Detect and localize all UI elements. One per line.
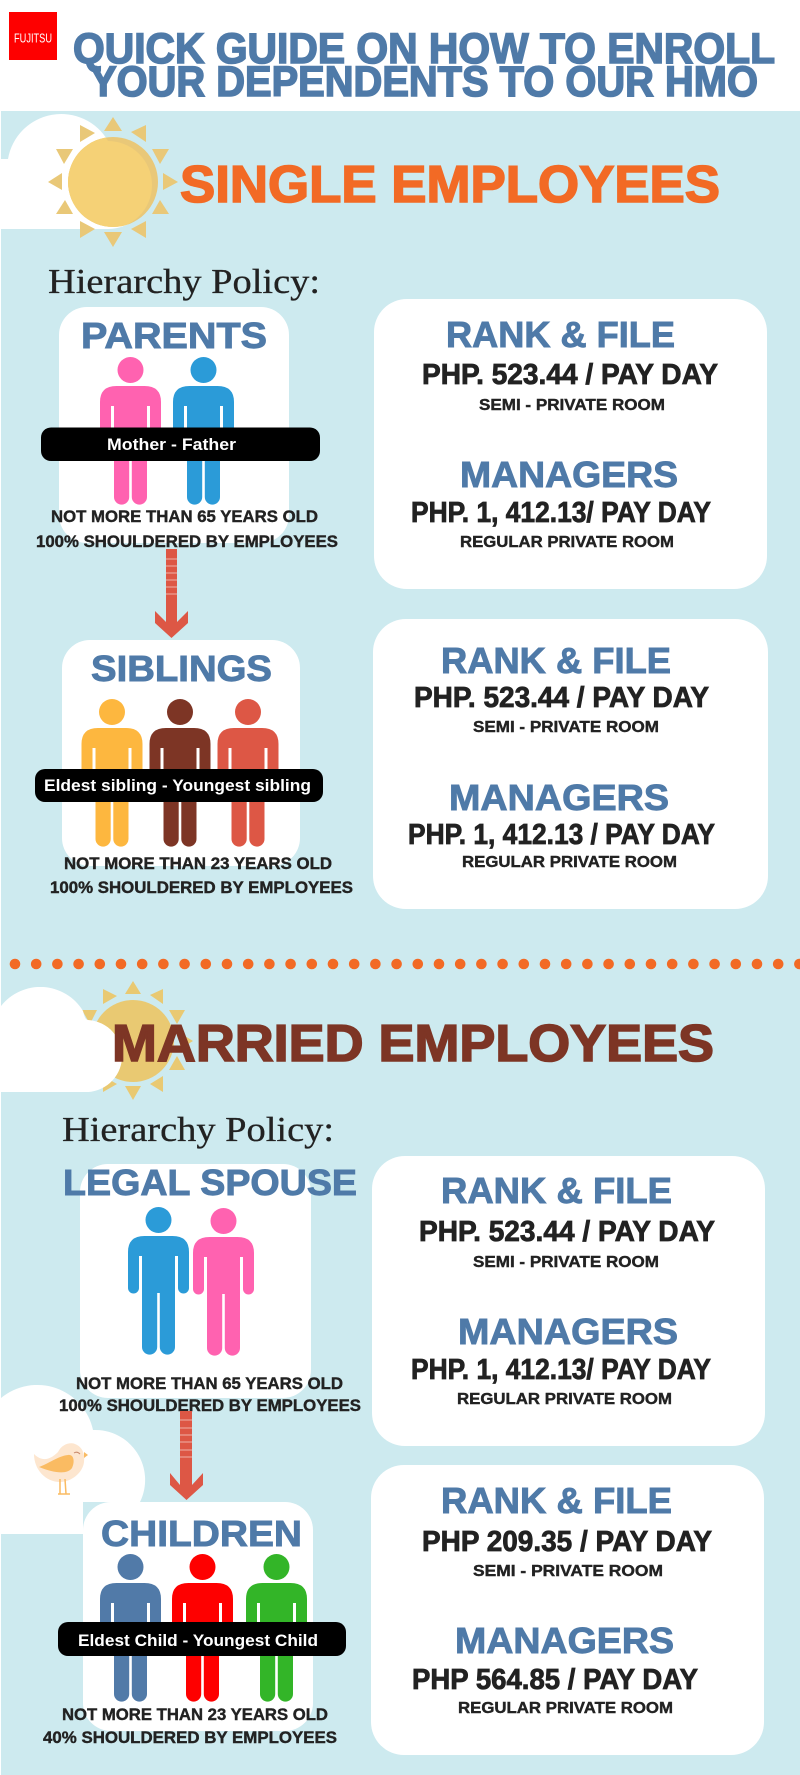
text: siblings conditions: [50, 855, 353, 897]
panel: married spouse pricing: PHP. 523.44 / PAY DAY: [419, 1216, 715, 1248]
cloud: lower left: [1, 1385, 145, 1534]
icon: youngest sibling figure: [218, 699, 278, 847]
heading: parents: PARENTS: [81, 315, 267, 356]
label bar: eldest - youngest sibling: Eldest sibling - Youngest sibling: [44, 777, 311, 795]
icon: middle child figure: [172, 1554, 233, 1702]
panel: legal spouse: [63, 1162, 357, 1398]
label bar: eldest - youngest child: Eldest Child - Youngest Child: [78, 1632, 318, 1650]
label bar: eldest - youngest child: [58, 1622, 346, 1656]
panel: married children pricing: MANAGERS: [455, 1620, 674, 1661]
label bar: eldest - youngest sibling: [35, 769, 323, 802]
panel: single siblings pricing: MANAGERS: [449, 777, 669, 818]
icon: youngest child figure: [246, 1554, 307, 1702]
panel: married children pricing: [371, 1465, 764, 1755]
panel: single siblings pricing: SEMI - PRIVATE ROOM: [473, 719, 659, 736]
icon: sun, married section: [82, 981, 193, 1100]
text: siblings conditions: NOT MORE THAN 23 YEARS OLD: [64, 855, 332, 873]
icon: sun, single section: [48, 117, 178, 247]
heading: legal spouse: LEGAL SPOUSE: [63, 1162, 357, 1203]
panel: married spouse pricing: RANK & FILE: [441, 1170, 672, 1211]
icon: eldest child figure: [100, 1554, 161, 1702]
panel: single parents pricing: SEMI - PRIVATE ROOM: [479, 397, 665, 414]
text: spouse conditions: [59, 1375, 361, 1415]
icon: father figure: [173, 357, 234, 505]
text: hierarchy policy, single: Hierarchy Policy:: [48, 262, 320, 301]
icon: middle sibling figure: [150, 699, 210, 847]
cloud: top left: [1, 114, 152, 229]
text: parents conditions: 100% SHOULDERED BY EMPLOYEES: [36, 533, 338, 551]
label bar: mother - father: Mother - Father: [107, 436, 237, 454]
panel: married children pricing: RANK & FILE: [441, 1480, 672, 1521]
panel: married spouse pricing: REGULAR PRIVATE ROOM: [457, 1391, 672, 1408]
panel: married children pricing: REGULAR PRIVATE ROOM: [458, 1700, 673, 1717]
panel: single siblings pricing: [373, 619, 768, 909]
text: children conditions: NOT MORE THAN 23 YEARS OLD: [62, 1706, 328, 1724]
text: parents conditions: NOT MORE THAN 65 YEARS OLD: [51, 508, 318, 526]
title: [73, 25, 775, 106]
panel: single parents pricing: PHP. 1, 412.13/ PAY DAY: [411, 497, 711, 529]
icon: eldest sibling figure: [82, 699, 142, 847]
panel: single siblings pricing: PHP. 523.44 / PAY DAY: [414, 682, 709, 714]
arrow: parents to siblings: [155, 549, 188, 638]
panel: single parents pricing: MANAGERS: [460, 454, 678, 495]
panel: single parents pricing: REGULAR PRIVATE ROOM: [460, 534, 674, 551]
panel: single siblings pricing: RANK & FILE: [441, 640, 671, 681]
text: children conditions: [43, 1706, 337, 1747]
cloud: married section: [1, 987, 122, 1092]
panel: single parents pricing: PHP. 523.44 / PAY DAY: [422, 359, 718, 391]
panel: single parents pricing: [374, 299, 767, 589]
arrow: spouse to children: [170, 1411, 203, 1500]
panel: single siblings pricing: REGULAR PRIVATE ROOM: [462, 854, 677, 871]
panel: married spouse pricing: MANAGERS: [458, 1311, 678, 1352]
panel: married spouse pricing: PHP. 1, 412.13/ PAY DAY: [411, 1354, 711, 1386]
label bar: mother - father: [41, 428, 320, 461]
title: YOUR DEPENDENTS TO OUR HMO: [90, 58, 758, 106]
text: spouse conditions: NOT MORE THAN 65 YEARS OLD: [76, 1375, 343, 1393]
text: children conditions: 40% SHOULDERED BY EMPLOYEES: [43, 1729, 337, 1747]
heading: children: CHILDREN: [101, 1513, 302, 1554]
icon: husband figure: [128, 1207, 189, 1355]
heading: siblings: SIBLINGS: [91, 648, 272, 689]
heading: single employees: SINGLE EMPLOYEES: [180, 156, 720, 214]
panel: siblings: [35, 640, 353, 897]
text: siblings conditions: 100% SHOULDERED BY EMPLOYEES: [50, 879, 353, 897]
panel: single siblings pricing: PHP. 1, 412.13 / PAY DAY: [408, 819, 715, 851]
text: hierarchy policy, married: Hierarchy Policy:: [62, 1110, 334, 1149]
logo: Fujitsu: FUJITSU: [14, 30, 52, 46]
panel: single parents pricing: RANK & FILE: [446, 314, 675, 355]
panel: married children pricing: PHP 564.85 / PAY DAY: [412, 1664, 698, 1696]
heading: married employees: MARRIED EMPLOYEES: [112, 1015, 714, 1073]
text: spouse conditions: 100% SHOULDERED BY EMPLOYEES: [59, 1397, 361, 1415]
icon: wife figure: [193, 1208, 254, 1356]
icon: bird: [34, 1443, 88, 1494]
logo: Fujitsu: [9, 12, 57, 60]
panel: married children pricing: PHP 209.35 / PAY DAY: [422, 1526, 712, 1558]
panel: parents: [36, 307, 338, 551]
title: QUICK GUIDE ON HOW TO ENROLL: [73, 25, 775, 73]
panel: married spouse pricing: [372, 1156, 765, 1446]
panel: married children pricing: SEMI - PRIVATE ROOM: [473, 1563, 663, 1580]
panel: married spouse pricing: SEMI - PRIVATE ROOM: [473, 1254, 659, 1271]
panel: children: [43, 1502, 346, 1747]
icon: mother figure: [100, 357, 161, 505]
text: parents conditions: [36, 508, 338, 551]
